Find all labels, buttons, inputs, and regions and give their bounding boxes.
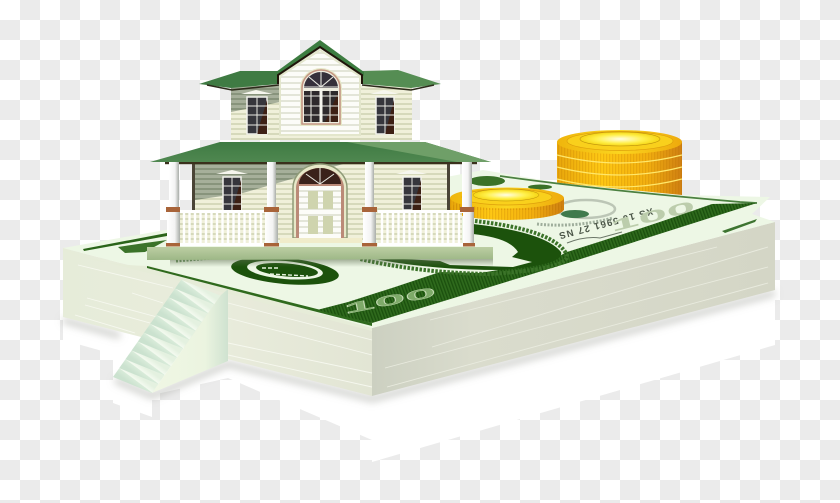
front door [293,164,347,238]
house [147,40,493,260]
small medallion [230,253,340,289]
green corner band [317,203,757,323]
right face edge lines [385,247,768,387]
money stack [63,170,775,396]
upper roof left [199,71,279,88]
grey seal [537,200,615,225]
gable roof [276,40,364,76]
platform shadow [170,259,493,267]
left railing [179,210,264,246]
upper right window [370,90,399,134]
eave shadow [165,162,477,164]
back stack of gold coins [557,130,682,198]
reflection under money stack [63,285,775,462]
upper left window [241,90,273,134]
ground storey wall [192,162,450,240]
second bill green sliver [722,219,757,233]
pale 100: 100 [609,197,697,236]
ground left window [216,170,248,211]
soft stack shadow [63,293,775,399]
front gold coin [450,188,564,220]
thin front-left border [147,266,372,326]
door step [280,238,362,243]
stairs [113,280,228,393]
signature [567,232,622,243]
gable front [280,50,360,135]
stair side [152,289,228,393]
main roof highlight [347,142,491,162]
column 4 [460,162,475,246]
platform [147,247,493,260]
stack left face [63,248,372,396]
stack right face [372,222,775,396]
gable dark trim [278,47,362,84]
bead marks [176,258,212,261]
serial number: XS 16 5961 27 NS [557,205,654,241]
right railing [378,210,463,246]
large medallion [360,221,567,274]
column 3 [362,162,377,246]
top bill [63,170,775,328]
ground right window [396,170,427,210]
column 2 [264,162,279,246]
soft curved bill edge at left [63,248,372,331]
steps [113,280,220,393]
paper edge lines [75,265,372,387]
gable arched window [300,68,342,126]
upper storey wall [231,86,412,140]
upper roof right [362,70,441,88]
pale 100 in band: 100 [343,284,437,317]
back green scroll [469,176,552,190]
bill left edge band [83,233,167,253]
thin back border [500,176,757,203]
main roof [150,142,491,162]
column 1 [166,162,180,246]
upper roof shadow [207,85,434,90]
